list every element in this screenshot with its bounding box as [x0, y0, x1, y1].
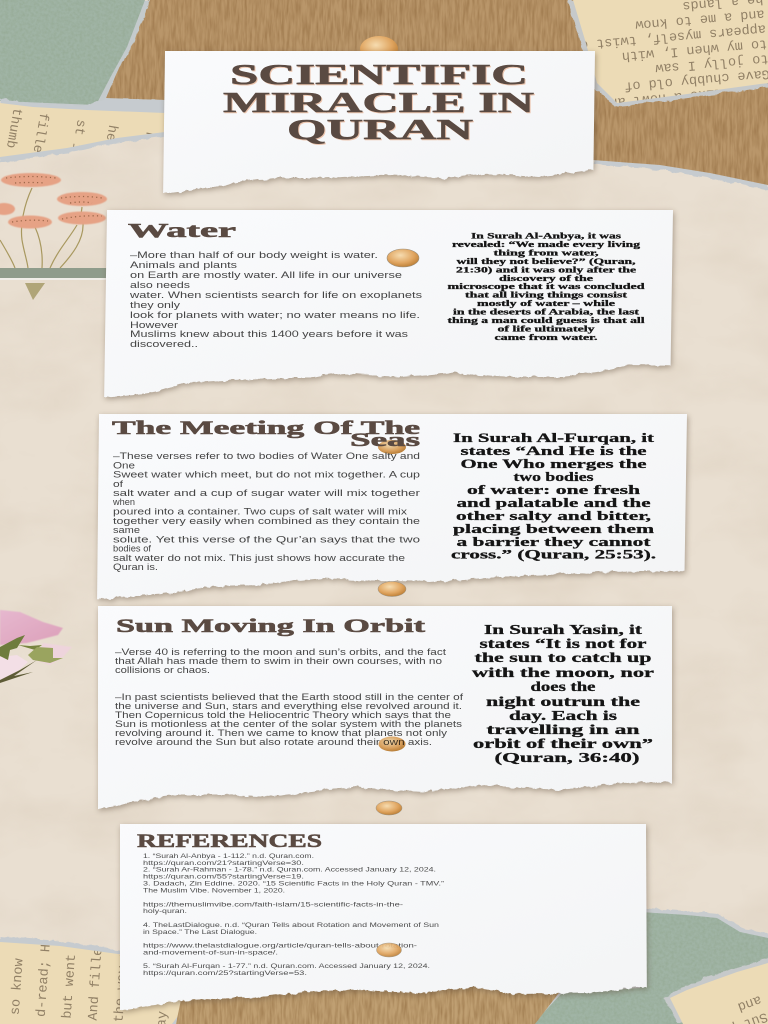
text: references list: https://themuslimvibe.com/faith-islam/15-scientific-facts-in-the- [143, 902, 403, 908]
text: water body: However [130, 320, 178, 330]
text: water quote: In Surah Al-Anbya, it was [471, 232, 621, 240]
pin: seas heading [378, 440, 406, 454]
text: water quote: thing from water, [494, 248, 598, 258]
heading: title text: MIRACLE IN [223, 87, 534, 119]
icon: pink rose [0, 610, 72, 683]
text: seas quote: a barrier they cannot [456, 535, 652, 549]
heading: sun moving in orbit: Sun Moving In Orbit [116, 617, 427, 637]
text: water body: –More than half of our body weight is water. [130, 250, 378, 260]
text: water body [129, 250, 422, 349]
text: water body: discovered.. [130, 339, 198, 349]
collage: green paper top-left [0, 0, 150, 108]
text: references list: The Muslim Vibe. November 1, 2020. [143, 888, 285, 894]
text: references list: 5. “Surah Al-Furqan - 1-77.” n.d. Quran.com. Accessed January 12, 2024. [143, 963, 430, 970]
collage: newspaper left: st it [66, 118, 88, 160]
text: sun body: revolve around the Sun but also rotate around their own axis. [115, 737, 432, 747]
text: seas quote: of water: one fresh [467, 483, 640, 497]
text: seas quote: cross.” (Quran, 25:53). [451, 548, 656, 562]
text: seas quote [451, 431, 656, 562]
text: water body: Animals and plants [130, 260, 237, 270]
collage: newspaper top-right: appears myself, twist or [571, 20, 766, 52]
panel: references [110, 814, 656, 1012]
text: seas body: bodies of [113, 544, 151, 554]
panel: the meeting of the seas [89, 404, 697, 600]
pin: water [387, 249, 419, 267]
text: water body: look for planets with water; no water means no life. [130, 310, 420, 320]
text: references list: holy-quran. [143, 908, 187, 915]
text: sun quote: night outrun the [486, 694, 640, 709]
text: water quote: mostly of water – while [477, 299, 616, 308]
text: water body: Muslims knew about this 1400 years before it was [130, 329, 408, 339]
collage: newspaper top-right: to my when I, with [621, 35, 768, 63]
text: seas quote: In Surah Al-Furqan, it [453, 431, 655, 445]
collage: newspaper left [0, 98, 164, 162]
text: seas body: same [113, 525, 140, 535]
text: water quote: microscope that it was concluded [448, 282, 645, 291]
text: references list: 1. “Surah Al-Anbya - 1-112.” n.d. Quran.com. [143, 853, 314, 860]
heading: meeting of the seas: The Meeting Of The [112, 419, 420, 439]
text: seas quote: One Who merges the [460, 457, 647, 471]
text: seas body: One [113, 460, 135, 470]
panel: sun moving in orbit [88, 596, 682, 812]
text: seas body: salt water and a cup of sugar water will mix together [113, 488, 420, 498]
heading: meeting of the seas: Seas [350, 431, 420, 451]
text: sun quote: In Surah Yasin, it [484, 622, 643, 637]
collage: newspaper top-right: meant like a howl and [601, 80, 768, 110]
text: seas body: of [113, 479, 124, 489]
collage: newspaper bottom-right corner: and [735, 991, 763, 1014]
text: seas body: –These verses refer to two bodies of Water One salty and [113, 451, 420, 461]
pin: below sun [376, 801, 402, 815]
text: water quote: will they not believe?” (Quran, [456, 257, 636, 266]
text: sun body: –Verse 40 is referring to the moon and sun’s orbits, and the fact [115, 647, 447, 657]
text: references list: 3. Dadach, Zin Eddine. 2020. “15 Scientific Facts in the Holy Quran - TMV.” [143, 880, 444, 888]
text: seas quote: two bodies [514, 470, 594, 484]
text: seas quote: states “And He is the [460, 444, 647, 458]
collage: newspaper bottom-left: the way up [112, 941, 133, 1023]
collage: newspaper left: he de [97, 124, 119, 166]
heading: meeting of the seas [112, 419, 420, 451]
collage: newspaper bottom-left: but went st [61, 929, 82, 1019]
text: seas quote: other salty and bitter, [456, 509, 651, 523]
heading: references: REFERENCES [137, 832, 322, 852]
collage: newspaper top-right [567, 0, 768, 107]
text: seas body: Sweet water which meet, but do not mix together. A cup [113, 470, 420, 480]
heading: title text [223, 59, 534, 146]
text: seas body [112, 451, 420, 572]
text: seas quote: placing between them [453, 522, 655, 536]
collage: newspaper top-right: to jolly I saw [655, 50, 768, 75]
collage: green paper bottom-right [528, 908, 768, 1024]
text: sun body: the universe and Sun, stars and everything else revolved around it. [115, 701, 462, 711]
icon: pressed flowers [0, 173, 108, 300]
text: sun body: collisions or chaos. [115, 665, 210, 675]
collage: newspaper left: filled [27, 111, 50, 162]
collage: newspaper bottom-left: And filled [86, 939, 107, 1021]
text: sun quote: the sun to catch up [474, 650, 652, 665]
text: references list: 4. TheLastDialogue. n.d. “Quran Tells about Rotation and Movement of Sun [143, 922, 439, 929]
text: sun quote: states “It is not for [480, 636, 647, 651]
collage: newspaper bottom-left: d-read; He [35, 936, 55, 1017]
text: references list: https://quran.com/21?startingVerse=30. [143, 860, 304, 867]
text: sun quote: with the moon, nor [472, 665, 654, 680]
text: sun body: that Allah has made them to swim in their own courses, with no [115, 656, 442, 666]
collage: brown paper top [100, 0, 768, 190]
text: sun body: revolving around it. Then we came to know that planets not only [115, 728, 447, 738]
collage: newspaper bottom-right corner [665, 958, 768, 1024]
pin: references [376, 943, 402, 957]
text: references list: in Space.” The Last Dialogue. [143, 929, 257, 936]
text: sun quote: does the [530, 679, 596, 694]
heading: title text: QURAN [287, 114, 473, 146]
text: sun quote: travelling in an [486, 722, 641, 737]
text: sun body: –In past scientists believed that the Earth stood still in the center of [115, 692, 464, 702]
text: water quote [448, 232, 646, 342]
text: seas body: together very easily when combined as they contain the [113, 516, 420, 526]
text: references list [143, 853, 444, 977]
panel: title [155, 40, 605, 195]
text: water body: also needs [130, 280, 190, 290]
collage: newspaper left: know [136, 130, 157, 165]
text: references list: https://quran.com/25?startingVerse=53. [143, 970, 307, 977]
text: sun body: Sun is motionless at the center of the solar system with the planets [115, 719, 462, 729]
text: water quote: that all living things consist [465, 290, 628, 300]
text: sun quote: day. Each is [509, 708, 617, 723]
text: water body: water. When scientists search for life on exoplanets [129, 290, 422, 300]
text: water quote: thing a man could guess is that all [448, 316, 646, 325]
panel: water [97, 200, 683, 398]
text: water quote: discovery of the [499, 274, 594, 283]
text: references list: and-movement-of-sun-in-space/. [143, 950, 278, 956]
text: water quote: of life ultimately [498, 324, 594, 334]
text: water quote: revealed: “We made every living [452, 240, 640, 249]
text: sun quote: orbit of their own” [473, 736, 653, 751]
pin: top [360, 36, 398, 62]
text: references list: https://www.thelastdialogue.org/article/quran-tells-about-rotation- [143, 942, 417, 950]
heading: water: Water [128, 221, 237, 242]
text: sun body [115, 647, 464, 747]
text: seas body: Quran is. [113, 562, 158, 572]
pin: below seas [378, 582, 406, 596]
text: references list: https://quran.com/55?startingVerse=19. [143, 874, 304, 880]
collage: newspaper bottom-left: so know [9, 958, 28, 1016]
text: references list: 2. “Surah Ar-Rahman - 1-78.” n.d. Quran.com. Accessed January 12, 2024. [143, 866, 436, 874]
text: sun body: Then Copernicus told the Heliocentric Theory which says that the [115, 710, 451, 720]
collage: newspaper top-right: and a me to know [635, 5, 765, 32]
text: seas body: poured into a container. Two cups of salt water will mix [113, 506, 407, 516]
pin: sun text [378, 736, 406, 752]
collage: newspaper top-right: Gave chubby old of [624, 65, 768, 93]
collage: newspaper bottom-left [0, 936, 180, 1024]
text: sun quote [472, 622, 654, 765]
text: water quote: 21:30) and it was only after the [456, 266, 637, 274]
text: water quote: in the deserts of Arabia, the last [453, 308, 640, 316]
text: seas body: salt water do not mix. This just shows how accurate the [113, 553, 405, 563]
collage: brown paper bottom [176, 985, 565, 1024]
text: water body: they only [130, 300, 180, 310]
text: seas quote: and palatable and the [456, 496, 651, 510]
text: water quote: came from water. [494, 333, 598, 342]
text: water body: on Earth are mostly water. All life in our universe [130, 270, 402, 280]
text: sun quote: (Quran, 36:40) [494, 750, 640, 765]
collage: newspaper left: thumb [2, 107, 24, 149]
heading: title text: SCIENTIFIC [230, 59, 528, 91]
text: seas body: when [112, 497, 135, 507]
text: seas body: solute. Yet this verse of the Qur’an says that the two [113, 534, 420, 544]
